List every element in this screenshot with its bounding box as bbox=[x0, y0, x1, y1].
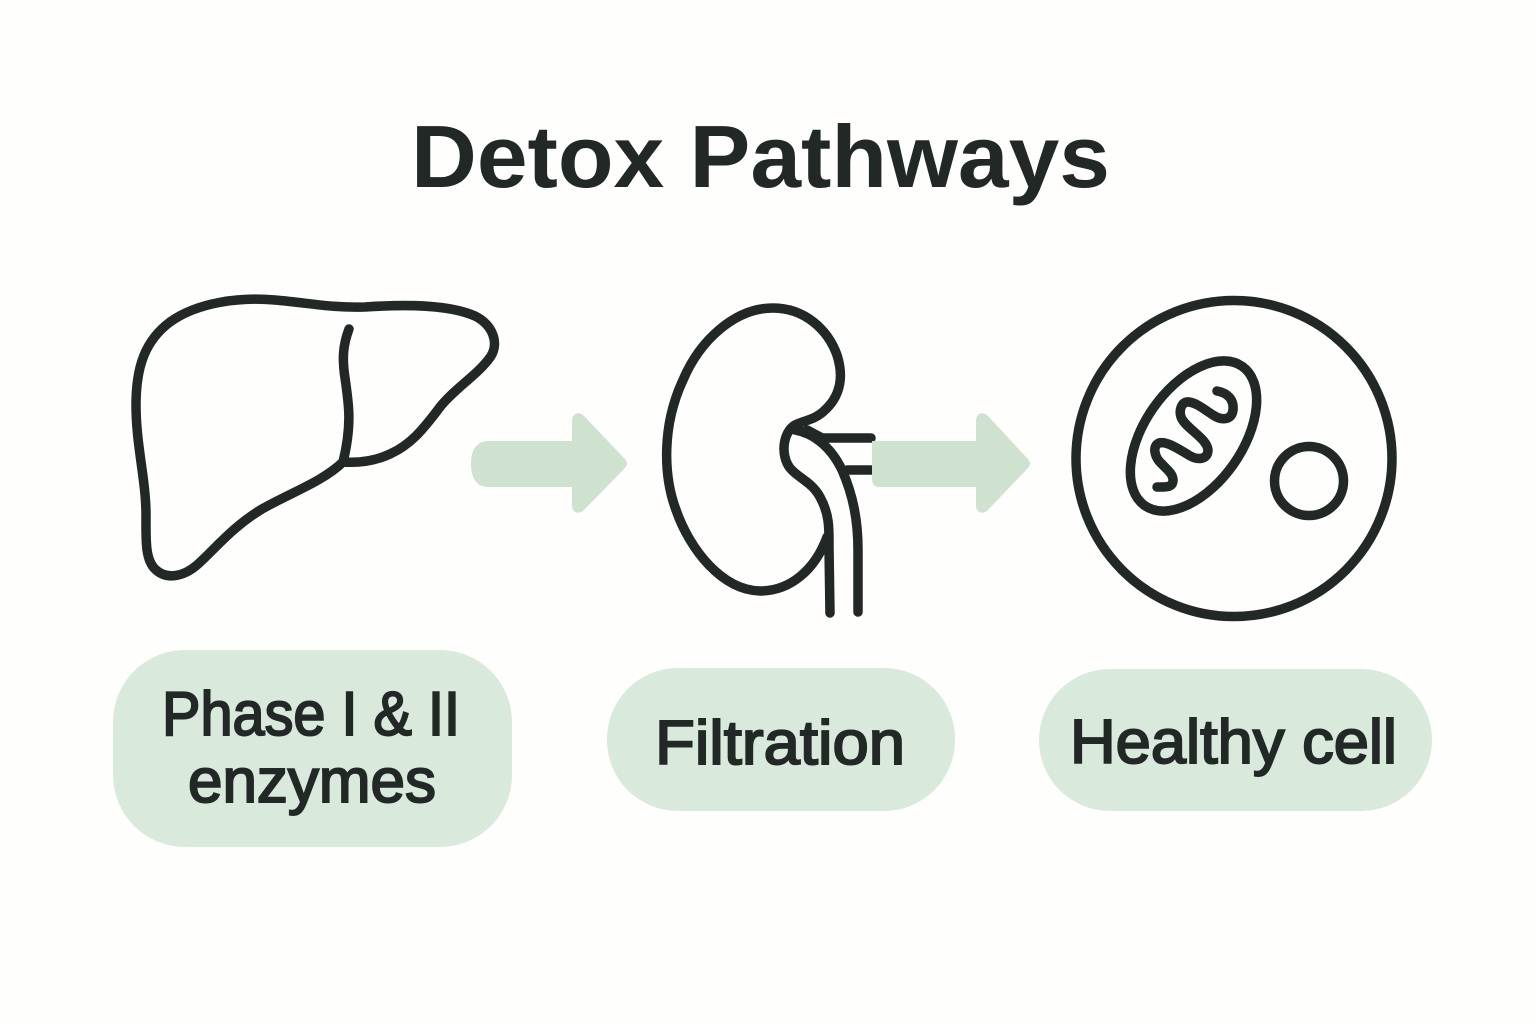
arrow: kidney to cell bbox=[872, 413, 1030, 513]
mitochondrial cristae bbox=[1155, 391, 1233, 487]
label: Filtration bbox=[607, 668, 955, 811]
label: Phase I & II enzymes: enzymes bbox=[188, 747, 436, 816]
mitochondrion bbox=[1105, 338, 1282, 534]
label: Healthy cell bbox=[1039, 669, 1432, 811]
title: Detox Pathways bbox=[411, 107, 1110, 206]
label: Healthy cell: Healthy cell bbox=[1070, 708, 1397, 777]
label: Phase I & II enzymes: Phase I & II bbox=[162, 680, 460, 749]
icon: healthy cell bbox=[1076, 300, 1392, 616]
icon: liver bbox=[136, 299, 494, 576]
cell membrane bbox=[1076, 300, 1392, 616]
label: Phase I & II enzymes bbox=[113, 650, 512, 847]
label: Filtration: Filtration bbox=[655, 709, 905, 778]
vesicle bbox=[1274, 446, 1344, 516]
icon: kidney bbox=[667, 308, 871, 613]
arrow: liver to kidney bbox=[471, 413, 627, 513]
